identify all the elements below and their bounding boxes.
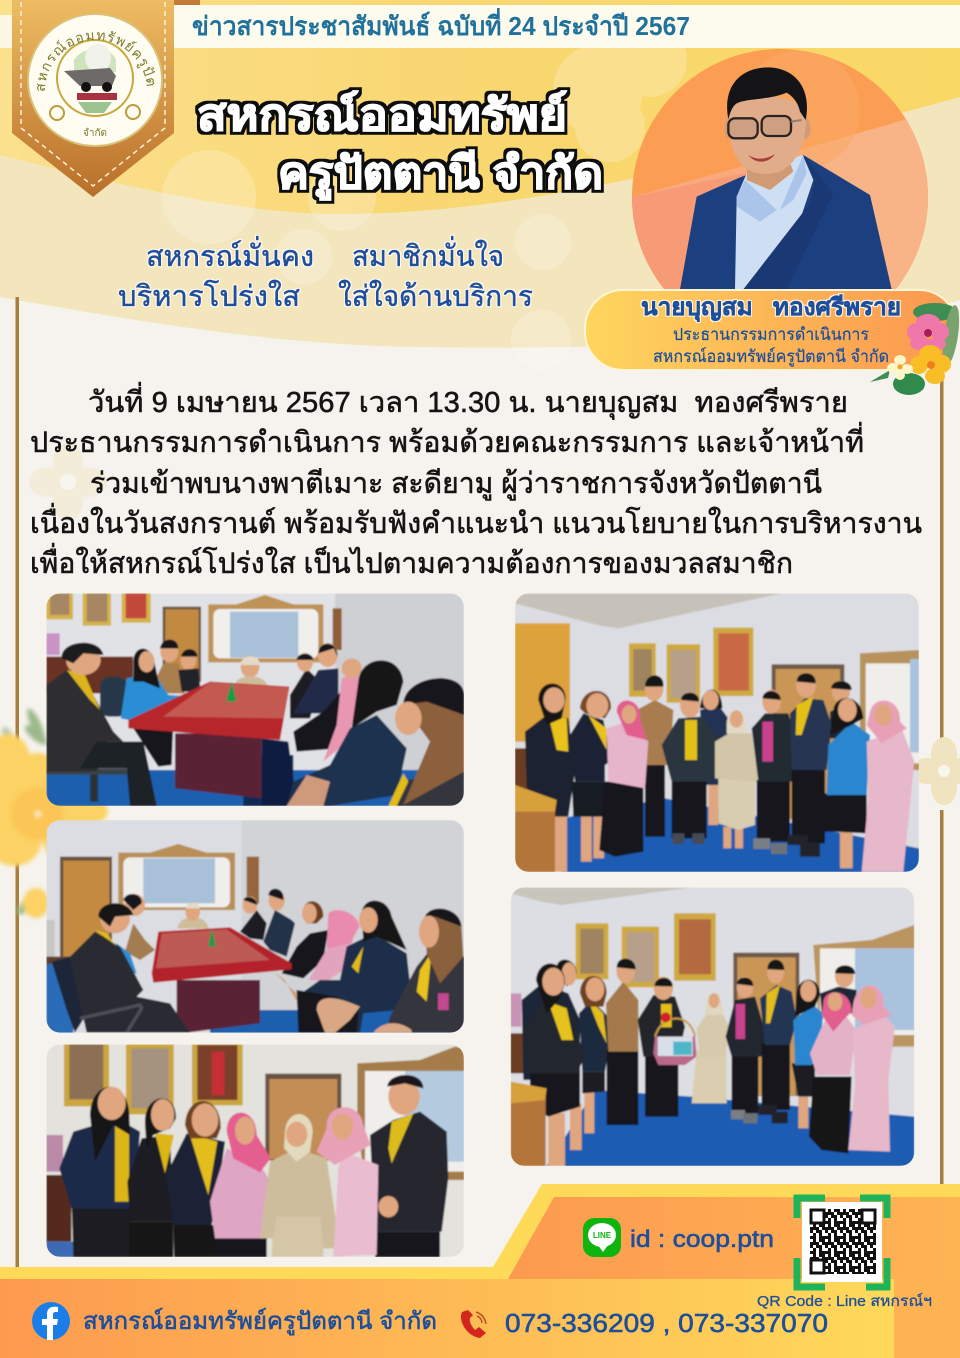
officer: [692, 992, 730, 1103]
person 9 man tall: [788, 672, 832, 857]
person 3 woman in pink hijab: [599, 700, 648, 857]
photo: meeting at red table, view from door side: [46, 820, 464, 1033]
slogan: สหกรณ์มั่นคง: [146, 236, 314, 273]
icon: facebook: [32, 1302, 70, 1340]
person 8 man in dark jacket: [752, 690, 797, 854]
side rules: [16, 297, 944, 1267]
flowers on name plate: [870, 303, 960, 395]
icon: line: LINE: [593, 1231, 612, 1240]
men right of table: [240, 889, 295, 957]
header strip: [174, 5, 960, 48]
woman in pink hijab: [308, 910, 359, 982]
men behind table left: [156, 640, 201, 693]
slogan: [118, 236, 533, 313]
person 2 woman in navy: [569, 690, 612, 863]
slogan: ใส่ใจด้านบริการ: [338, 279, 533, 313]
woman pink dress: [317, 1107, 378, 1257]
ornament: left mandala: [29, 443, 107, 521]
logo seal: [27, 13, 163, 147]
line id: id : coop.ptn: [630, 1226, 774, 1253]
man in navy jacket: [680, 67, 892, 289]
woman 3 navy jacket yellow shirt: [166, 1101, 225, 1257]
photo: group with gift basket: [511, 887, 914, 1166]
man dark jacket pink shirt: [726, 977, 767, 1123]
QR caption: QR Code : Line สหกรณ์ฯ: [757, 1293, 932, 1310]
facebook: สหกรณ์ออมทรัพย์ครูปัตตานี จำกัด: [83, 1307, 437, 1336]
man on black chair: [52, 903, 190, 1033]
wooden desk: [511, 1082, 547, 1166]
woman in blue: [120, 648, 180, 768]
QR code: [797, 1198, 887, 1287]
person 1 woman in black jacket: [525, 684, 575, 872]
body text: [30, 382, 922, 580]
header strip: ข่าวสารประชาสัมพันธ์ ฉบับที่ 24 ประจำปี 2567: [192, 7, 690, 41]
left men and blue shirt: [117, 894, 155, 973]
body text: วันที่ 9 เมษายน 2567 เวลา 13.30 น. นายบุญสม ทองศรีพราย: [88, 382, 848, 420]
woman with long black hair: [297, 901, 410, 1033]
woman in hijab, far right group: [293, 658, 362, 762]
title: สหกรณ์ออมทรัพย์: [197, 90, 567, 140]
body text: ประธานกรรมการดำเนินการ พร้อมด้วยคณะกรรมการ และเจ้าหน้าที่: [30, 422, 864, 459]
photo: meeting at red table, view from left: [46, 593, 464, 806]
woman behind left: [522, 960, 582, 1150]
center officer: [235, 656, 267, 685]
name plate: [585, 290, 957, 370]
facebook: [32, 1302, 437, 1340]
body text: เนื่องในวันสงกรานต์ พร้อมรับฟังคำแนะนำ แนวนโยบายในการบริหารงาน: [30, 503, 922, 540]
red table: [152, 927, 292, 1033]
wooden desk: [515, 785, 557, 872]
name plate: นายบุญสม ทองศรีพราย: [641, 294, 901, 323]
center officer: [177, 902, 208, 928]
logo seal: จำกัด: [83, 128, 107, 139]
woman on right with badge: [373, 909, 464, 1033]
ornament: right mandala: [910, 737, 960, 805]
woman foreground black jacket: [523, 963, 585, 1166]
name plate: สหกรณ์ออมทรัพย์ครูปัตตานี จำกัด: [653, 347, 889, 367]
icon: line: [583, 1218, 621, 1257]
woman 1 navy jacket: [59, 1087, 140, 1257]
photo: group standing, twelve people: [515, 593, 919, 872]
man left foreground: [46, 643, 157, 806]
person 6 woman behind: [700, 690, 728, 825]
slogan: สมาชิกมั่นใจ: [352, 236, 504, 273]
man navy jacket: [758, 960, 797, 1123]
woman with highlighted hair: [388, 678, 464, 806]
person 4 man in batik: [637, 675, 673, 837]
gift basket: [653, 1012, 697, 1065]
footer bands: [0, 1184, 960, 1358]
person 11 woman in blue: [822, 698, 870, 868]
woman 2 black jacket: [127, 1098, 176, 1257]
officer center: [260, 1114, 340, 1257]
man 7 suit: [370, 1075, 448, 1257]
woman pink hijab black skirt: [809, 992, 857, 1153]
name plate: ประธานกรรมการดำเนินการ: [673, 325, 869, 344]
slogan: บริหารโปร่งใส: [118, 279, 300, 313]
man with basket: [638, 977, 685, 1117]
body text: เพื่อให้สหกรณ์โปร่งใส เป็นไปตามความต้องการของมวลสมาชิก: [30, 543, 793, 580]
photo: seven people standing: [46, 1044, 464, 1257]
title: [197, 90, 603, 200]
man behind right: [820, 965, 857, 1013]
woman pink dress right: [848, 985, 895, 1152]
icon: phone: [461, 1310, 486, 1338]
person 12 woman in pink dress: [862, 701, 914, 872]
person 10 man behind: [830, 681, 852, 738]
ornament: yellow flowers left: [0, 707, 110, 918]
line id: [583, 1218, 774, 1257]
body text: ร่วมเข้าพบนางพาตีเมาะ สะดียามู ผู้ว่าราชการจังหวัดปัตตานี: [90, 468, 822, 501]
woman in black with short hair: [273, 901, 328, 1002]
man batik: [606, 958, 638, 1125]
red table: [128, 682, 297, 806]
woman in blue: [792, 980, 823, 1128]
ribbon badge: [12, 0, 200, 197]
woman 4 pink hijab: [210, 1113, 271, 1257]
person 5 man center: [662, 692, 718, 844]
title: ครูปัตตานี จำกัด: [278, 149, 603, 200]
person 7 officer: [715, 710, 758, 848]
men right of table: [290, 643, 338, 718]
woman with long black hair: [287, 660, 407, 806]
woman brown hair: [579, 976, 613, 1133]
phone: 073-336209 , 073-337070: [505, 1308, 828, 1338]
portrait: [632, 49, 928, 289]
